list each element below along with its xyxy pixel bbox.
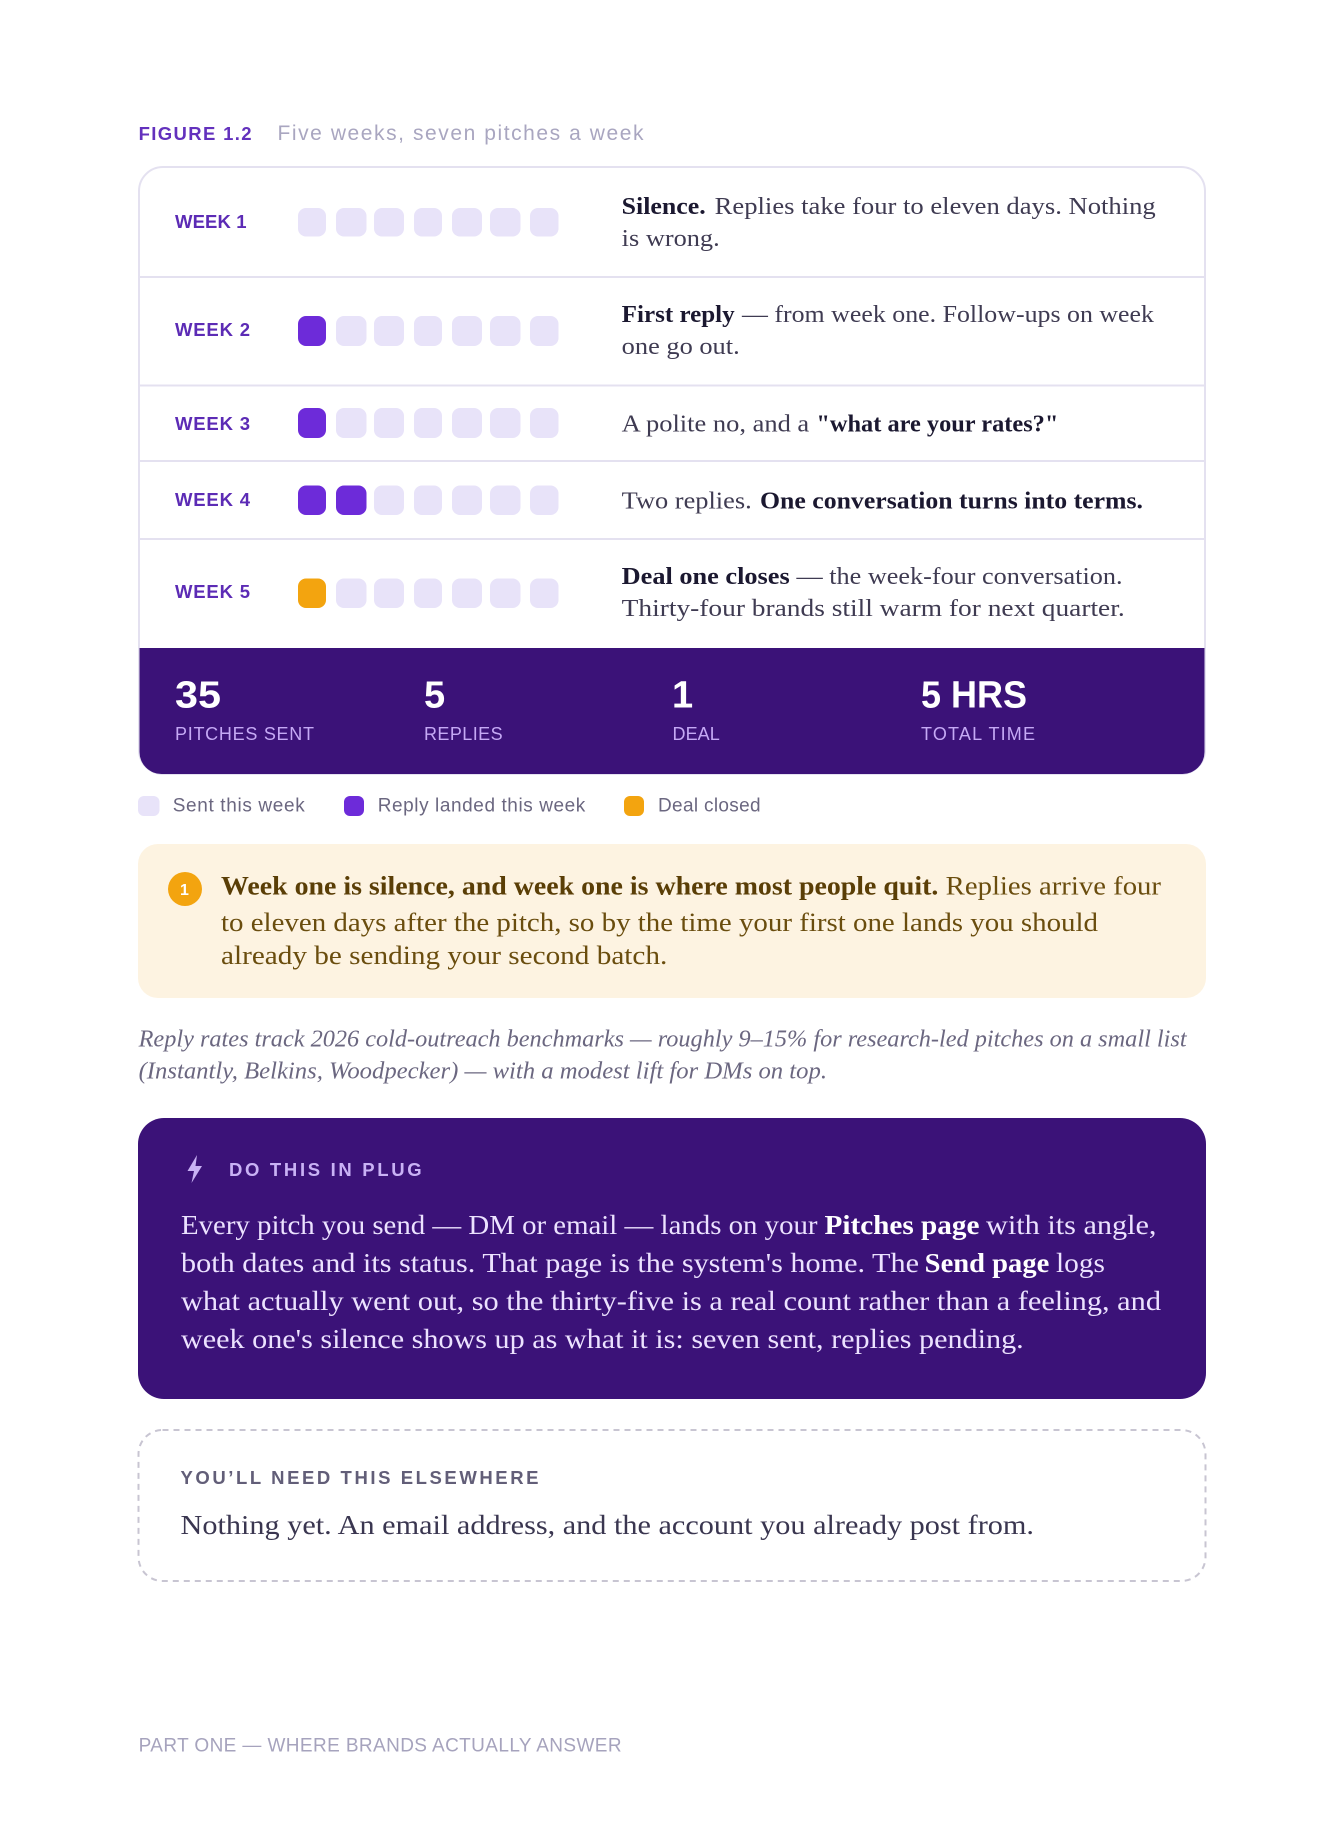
row: week 2: WEEK 2 bbox=[175, 319, 250, 340]
stat: deal bbox=[672, 674, 720, 744]
panel body text: week one's silence shows up as what it is: seven sent, replies pending. bbox=[181, 1324, 1024, 1354]
figure heading: Five weeks, seven pitches a week bbox=[278, 122, 644, 145]
legend: Reply landed this week bbox=[378, 796, 586, 817]
row: week 4 bbox=[175, 486, 1143, 515]
row: week 3 bbox=[175, 408, 1058, 438]
row: week 4: One conversation turns into terms. bbox=[760, 488, 1143, 514]
panel body text: both dates and its status. That page is the system's home. The bbox=[181, 1248, 919, 1278]
row: week 4: Two replies. bbox=[622, 488, 752, 514]
stat: deal: DEAL bbox=[672, 724, 720, 744]
stat: total time bbox=[921, 674, 1035, 744]
panel: weekly table bbox=[139, 167, 1205, 774]
row: week 3: "what are your rates?" bbox=[816, 412, 1058, 438]
text block: source note: Reply rates track 2026 cold-outreach benchmarks — roughly 9–15% for research-led pitches on a small list bbox=[138, 1026, 1188, 1052]
stat: replies bbox=[424, 674, 503, 744]
panel: you'll need this elsewhere: YOU’LL NEED THIS ELSEWHERE bbox=[180, 1467, 538, 1488]
row: week 2: one go out. bbox=[622, 334, 740, 360]
row: week 1 bbox=[175, 194, 1156, 252]
stat: deal: 1 bbox=[672, 674, 693, 716]
stat: replies: 5 bbox=[424, 674, 445, 716]
row: week 2: — from week one. Follow-ups on week bbox=[741, 302, 1154, 328]
stat: pitches sent: 35 bbox=[175, 674, 221, 716]
panel body text: Every pitch you send — DM or email — lands on your bbox=[181, 1210, 818, 1240]
panel body text: what actually went out, so the thirty-five is a real count rather than a feeling, and bbox=[181, 1286, 1162, 1316]
panel body text bbox=[181, 1210, 1162, 1354]
panel body text: Send page bbox=[925, 1248, 1049, 1278]
panel body text: Pitches page bbox=[824, 1210, 980, 1240]
panel: you'll need this elsewhere: Nothing yet. An email address, and the account you already post from. bbox=[180, 1510, 1034, 1540]
row: week 1: Replies take four to eleven days. Nothing bbox=[715, 194, 1156, 220]
row: week 3: A polite no, and a bbox=[622, 412, 810, 438]
row: week 4: WEEK 4 bbox=[175, 489, 251, 510]
row: week 2: First reply bbox=[622, 302, 735, 328]
callout: week one warning: Replies arrive four bbox=[946, 871, 1161, 900]
stat: replies: REPLIES bbox=[424, 724, 503, 744]
row: week 1: is wrong. bbox=[622, 226, 720, 252]
callout: week one warning bbox=[138, 844, 1206, 998]
text block: source note: (Instantly, Belkins, Woodpecker) — with a modest lift for DMs on top. bbox=[139, 1058, 827, 1084]
icon: numbered badge bbox=[168, 872, 202, 906]
legend bbox=[138, 796, 761, 817]
footer: PART ONE — WHERE BRANDS ACTUALLY ANSWER bbox=[139, 1736, 622, 1757]
panel: you'll need this elsewhere bbox=[138, 1430, 1206, 1581]
stats band bbox=[140, 648, 1204, 774]
stat: pitches sent bbox=[175, 674, 314, 744]
figure heading: FIGURE 1.2 bbox=[139, 123, 252, 144]
row: week 5: WEEK 5 bbox=[175, 581, 250, 602]
panel heading: DO THIS IN PLUG bbox=[229, 1159, 422, 1180]
text block: source note bbox=[138, 1026, 1188, 1084]
legend: Deal closed bbox=[658, 796, 761, 817]
row: week 5 bbox=[175, 564, 1125, 622]
callout: week one warning: Week one is silence, and week one is where most people quit. bbox=[221, 871, 938, 900]
panel: do this in plug bbox=[138, 1118, 1206, 1399]
row: week 5: Thirty-four brands still warm for next quarter. bbox=[622, 596, 1125, 622]
stat: total time: 5 HRS bbox=[921, 674, 1027, 716]
row: week 1: WEEK 1 bbox=[175, 211, 246, 232]
icon: lightning bolt bbox=[188, 1155, 202, 1183]
row: week 5: Deal one closes bbox=[622, 564, 790, 590]
icon: numbered badge: 1 bbox=[180, 882, 189, 899]
panel body text: with its angle, bbox=[986, 1210, 1156, 1240]
legend: Sent this week bbox=[173, 796, 305, 817]
row: week 3: WEEK 3 bbox=[175, 413, 250, 434]
stat: total time: TOTAL TIME bbox=[921, 724, 1035, 744]
callout: week one warning: to eleven days after the pitch, so by the time your first one lands you should bbox=[221, 908, 1098, 937]
stat: pitches sent: PITCHES SENT bbox=[175, 724, 314, 744]
callout: week one warning: already be sending your second batch. bbox=[221, 941, 667, 970]
panel body text: logs bbox=[1056, 1248, 1105, 1278]
row: week 2 bbox=[175, 302, 1154, 360]
row: week 5: — the week-four conversation. bbox=[795, 564, 1122, 590]
row: week 1: Silence. bbox=[622, 194, 706, 220]
